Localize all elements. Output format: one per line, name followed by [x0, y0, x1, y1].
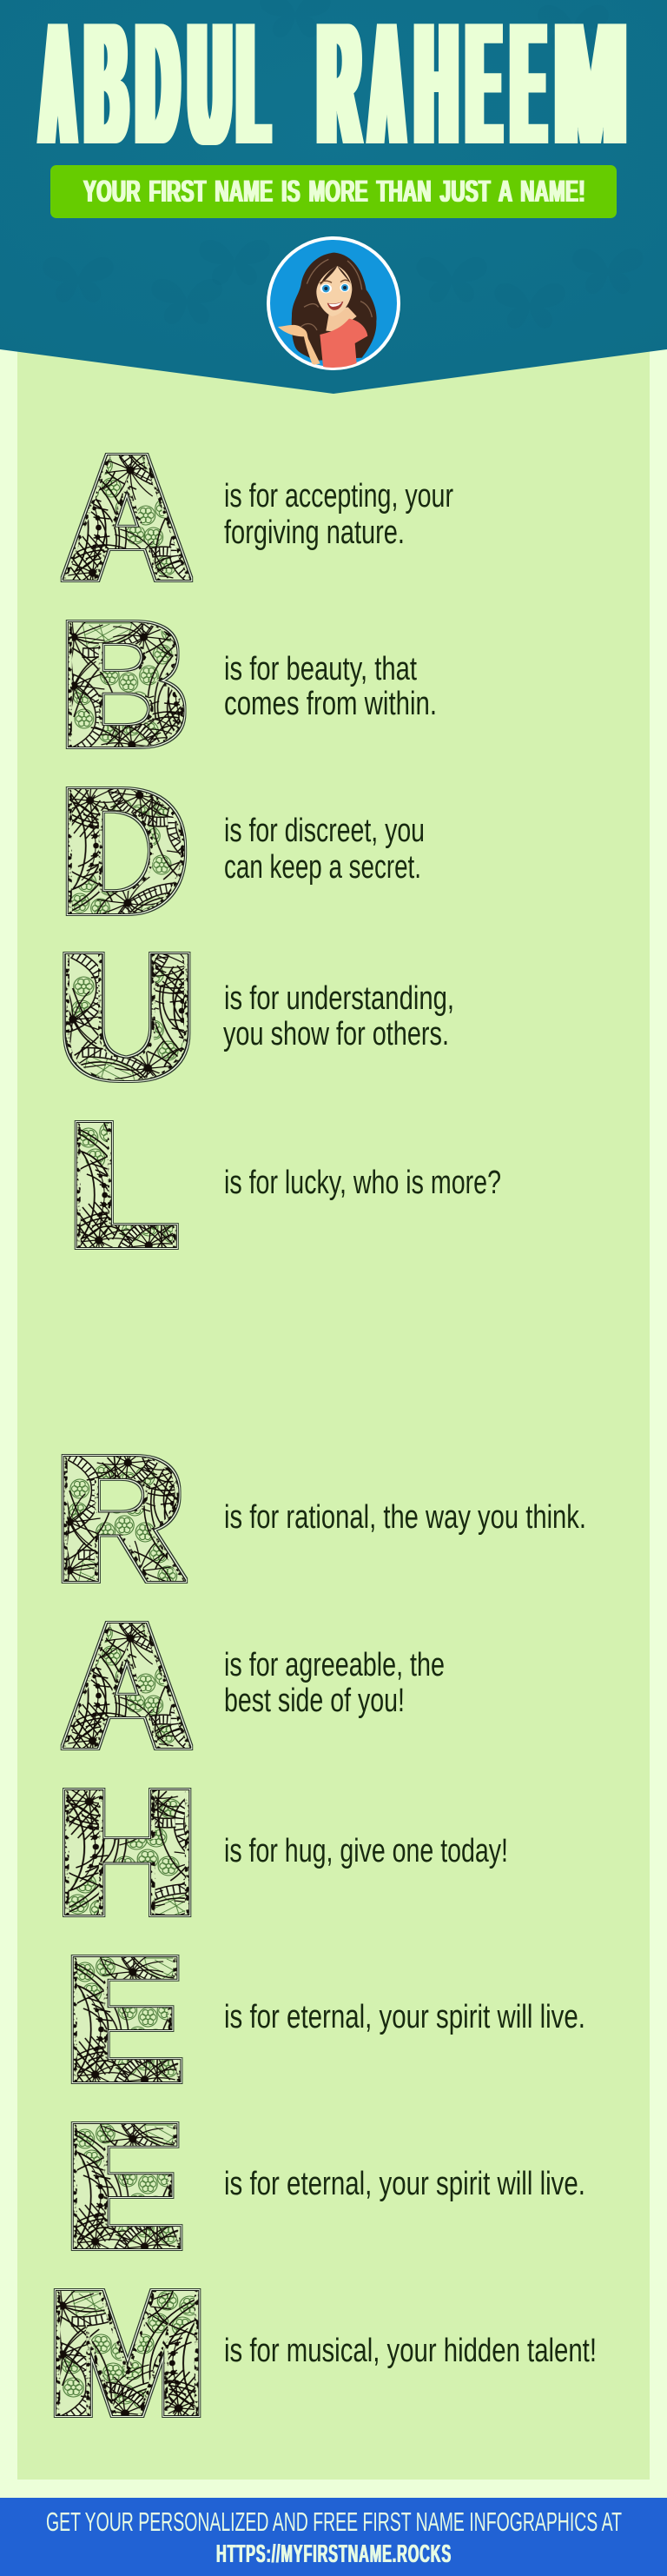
subtitle pill [50, 165, 617, 218]
text: lucky: is for lucky, who is more? [224, 1165, 501, 1201]
icon: avatar woman in circle [267, 236, 400, 370]
footer url: HTTPS://MYFIRSTNAME.ROCKS [216, 2540, 452, 2568]
text: agreeable: best side of you! [224, 1683, 405, 1719]
letter L: L [69, 1086, 177, 1285]
title [42, 0, 626, 181]
row: A in RAHEEM [63, 1587, 445, 1785]
letter E: E [66, 1920, 182, 2119]
text: discreet [224, 813, 425, 886]
letter R: R [56, 1419, 184, 1618]
text: agreeable: is for agreeable, the [224, 1647, 445, 1683]
row: D [61, 752, 425, 951]
text: accepting: forgiving nature. [224, 515, 405, 551]
row: B [61, 585, 437, 784]
row: A in ABDUL [63, 419, 453, 617]
header banner [0, 0, 667, 394]
text: understanding: you show for others. [223, 1016, 449, 1052]
text: understanding [223, 980, 454, 1052]
row: E second [66, 2087, 585, 2286]
row: U [59, 916, 454, 1116]
row: H [57, 1753, 508, 1952]
row: R [56, 1419, 586, 1618]
row: E first [66, 1920, 585, 2119]
letter U: U [59, 916, 195, 1116]
footer band [0, 2498, 667, 2576]
row: M [49, 2253, 597, 2453]
text: accepting [224, 478, 453, 551]
text: beauty [224, 651, 437, 722]
letter B: B [61, 585, 188, 784]
row: L [69, 1086, 501, 1285]
text: beauty: comes from within. [224, 686, 437, 722]
letter A: A [63, 1587, 190, 1785]
letter E: E [66, 2087, 182, 2286]
text: hug: is for hug, give one today! [224, 1833, 508, 1869]
letter H: H [57, 1753, 197, 1952]
text: discreet: can keep a secret. [224, 849, 421, 886]
text: understanding: is for understanding, [224, 980, 454, 1017]
letter M: M [49, 2253, 206, 2453]
letter D: D [61, 752, 188, 951]
text: accepting: is for accepting, your [224, 478, 453, 515]
text: beauty: is for beauty, that [224, 651, 417, 687]
panel: letters background [17, 330, 650, 2480]
text: agreeable [224, 1647, 445, 1719]
text: discreet: is for discreet, you [224, 813, 425, 849]
letter A: A [63, 419, 190, 617]
